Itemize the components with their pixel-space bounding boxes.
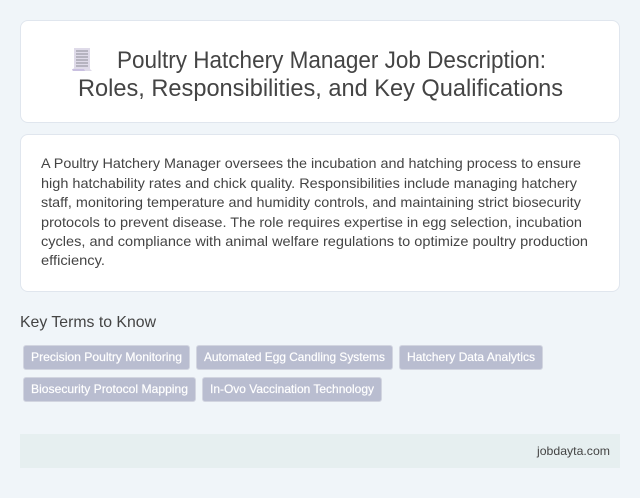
tag: In-Ovo Vaccination Technology (202, 377, 382, 402)
heading: key terms: Key Terms to Know (20, 314, 156, 331)
text block: description: cycles, and compliance with animal welfare regulations to optimize poultry production (41, 233, 588, 249)
panel: title card (20, 20, 620, 123)
title (78, 47, 563, 102)
tag labels: Automated Egg Candling Systems (204, 350, 385, 364)
title: Roles, Responsibilities, and Key Qualifications (78, 75, 563, 102)
text block: description: high hatchability rates and chick quality. Responsibilities include managing hatchery (41, 175, 577, 191)
text block: description: efficiency. (41, 252, 105, 268)
panel: description card (20, 134, 620, 292)
title: Poultry Hatchery Manager Job Description: (117, 47, 546, 74)
tag: Precision Poultry Monitoring (23, 345, 190, 370)
tag: Hatchery Data Analytics (399, 345, 543, 370)
text block: description: staff, monitoring temperature and humidity controls, and maintaining strict biosecurity (41, 194, 581, 210)
tag labels: In-Ovo Vaccination Technology (210, 382, 374, 396)
tag labels: Biosecurity Protocol Mapping (31, 382, 188, 396)
footer bar (20, 434, 620, 468)
tag labels (31, 350, 535, 396)
text block: description (41, 155, 588, 268)
text block: description: protocols to prevent disease. The role requires expertise in egg selection, incubation (41, 214, 582, 230)
icon: document scroll (72, 48, 92, 71)
tag labels: Precision Poultry Monitoring (31, 350, 182, 364)
tag labels: Hatchery Data Analytics (407, 350, 535, 364)
tag: Biosecurity Protocol Mapping (23, 377, 196, 402)
tag: Automated Egg Candling Systems (196, 345, 393, 370)
text block: description: A Poultry Hatchery Manager oversees the incubation and hatching process to ensure (41, 155, 581, 171)
footer text: source: jobdayta.com (536, 444, 610, 458)
